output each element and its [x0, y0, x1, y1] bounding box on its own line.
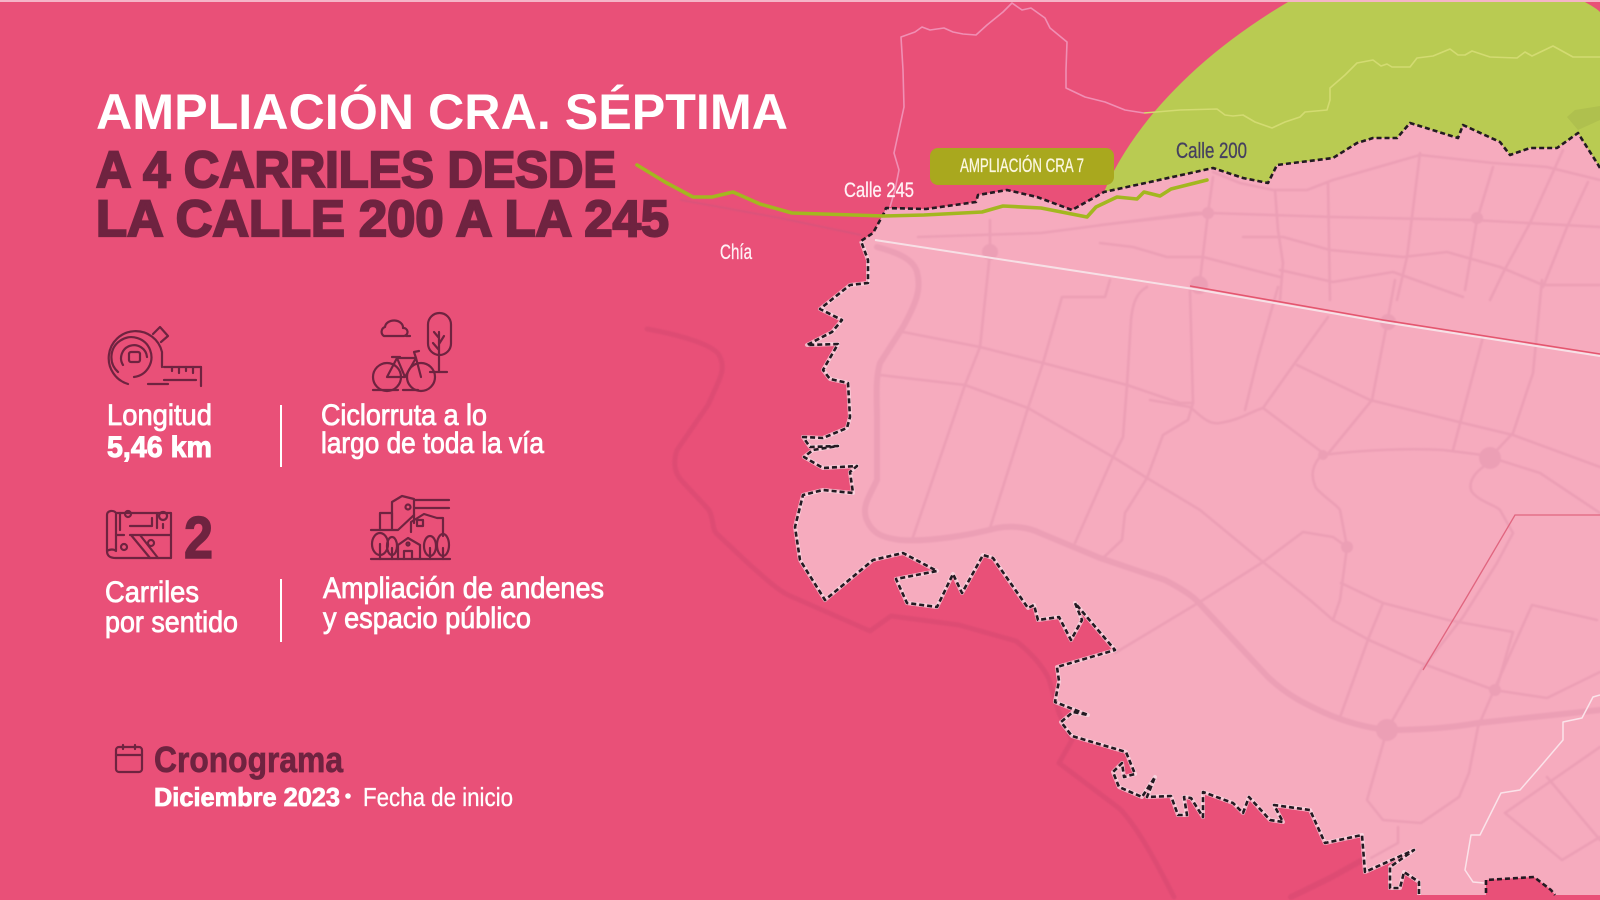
- text: Carriles por sentido: por sentido: [105, 606, 238, 639]
- divider: [280, 579, 282, 642]
- text: date: Diciembre 2023: [154, 782, 340, 812]
- map: white locality limit: [1465, 695, 1600, 883]
- number 2: 2: [184, 505, 213, 571]
- map: long highway line: [875, 240, 1600, 356]
- map label: pill Ampliación Cra 7: AMPLIACIÓN CRA 7: [960, 155, 1084, 177]
- map label: Calle 245: Calle 245: [844, 179, 914, 202]
- icon: street map: [107, 511, 171, 558]
- text: Ciclorruta: Ciclorruta a lo: [321, 399, 487, 432]
- text: Ciclorruta: [321, 399, 544, 460]
- title line 3: LA CALLE 200 A LA 245: [96, 190, 669, 247]
- icon: bicycle, tree and cloud: [373, 313, 451, 391]
- text: Ampliación de andenes: [323, 572, 604, 635]
- text: Cronograma: Cronograma: [154, 739, 344, 780]
- text: Ciclorruta: largo de toda la vía: [321, 427, 544, 460]
- text: Longitud 5,46 km: [107, 399, 212, 464]
- map: Bogotá urban area: [795, 123, 1600, 895]
- icon: houses and trees: [371, 496, 450, 559]
- text: Ampliación de andenes: Ampliación de andenes: [323, 572, 604, 605]
- icon: measuring tape: [109, 327, 201, 386]
- map: red locality line: [1423, 515, 1600, 670]
- map: river and road outside the city: [647, 200, 1366, 897]
- map label: Chía: Chía: [720, 241, 752, 264]
- text: Ampliación de andenes: y espacio público: [323, 602, 531, 635]
- divider: [280, 405, 282, 467]
- map: Bogotá dashed boundary: [795, 123, 1600, 895]
- text: Longitud 5,46 km: 5,46 km: [107, 431, 212, 464]
- text: Longitud 5,46 km: Longitud: [107, 399, 212, 432]
- route: Ampliación Cra 7 green line: [637, 165, 1207, 217]
- map label: Calle 200: Calle 200: [1176, 138, 1247, 163]
- title line 1: AMPLIACIÓN CRA. SÉPTIMA: [96, 84, 788, 140]
- text: Carriles por sentido: Carriles: [105, 576, 199, 609]
- map: road network: [865, 150, 1600, 860]
- text: date: [154, 782, 513, 812]
- top edge highlight: [0, 0, 1600, 2]
- title line 2: A 4 CARRILES DESDE: [96, 141, 616, 198]
- map: green hills area: [1104, 2, 1600, 260]
- text: date: Fecha de inicio: [363, 782, 513, 812]
- icon: calendar: [116, 745, 142, 772]
- map: municipal limit lines: [890, 3, 1600, 207]
- title: [96, 84, 788, 247]
- map label: pill Ampliación Cra 7: [930, 148, 1114, 185]
- text: Carriles por sentido: [105, 576, 238, 639]
